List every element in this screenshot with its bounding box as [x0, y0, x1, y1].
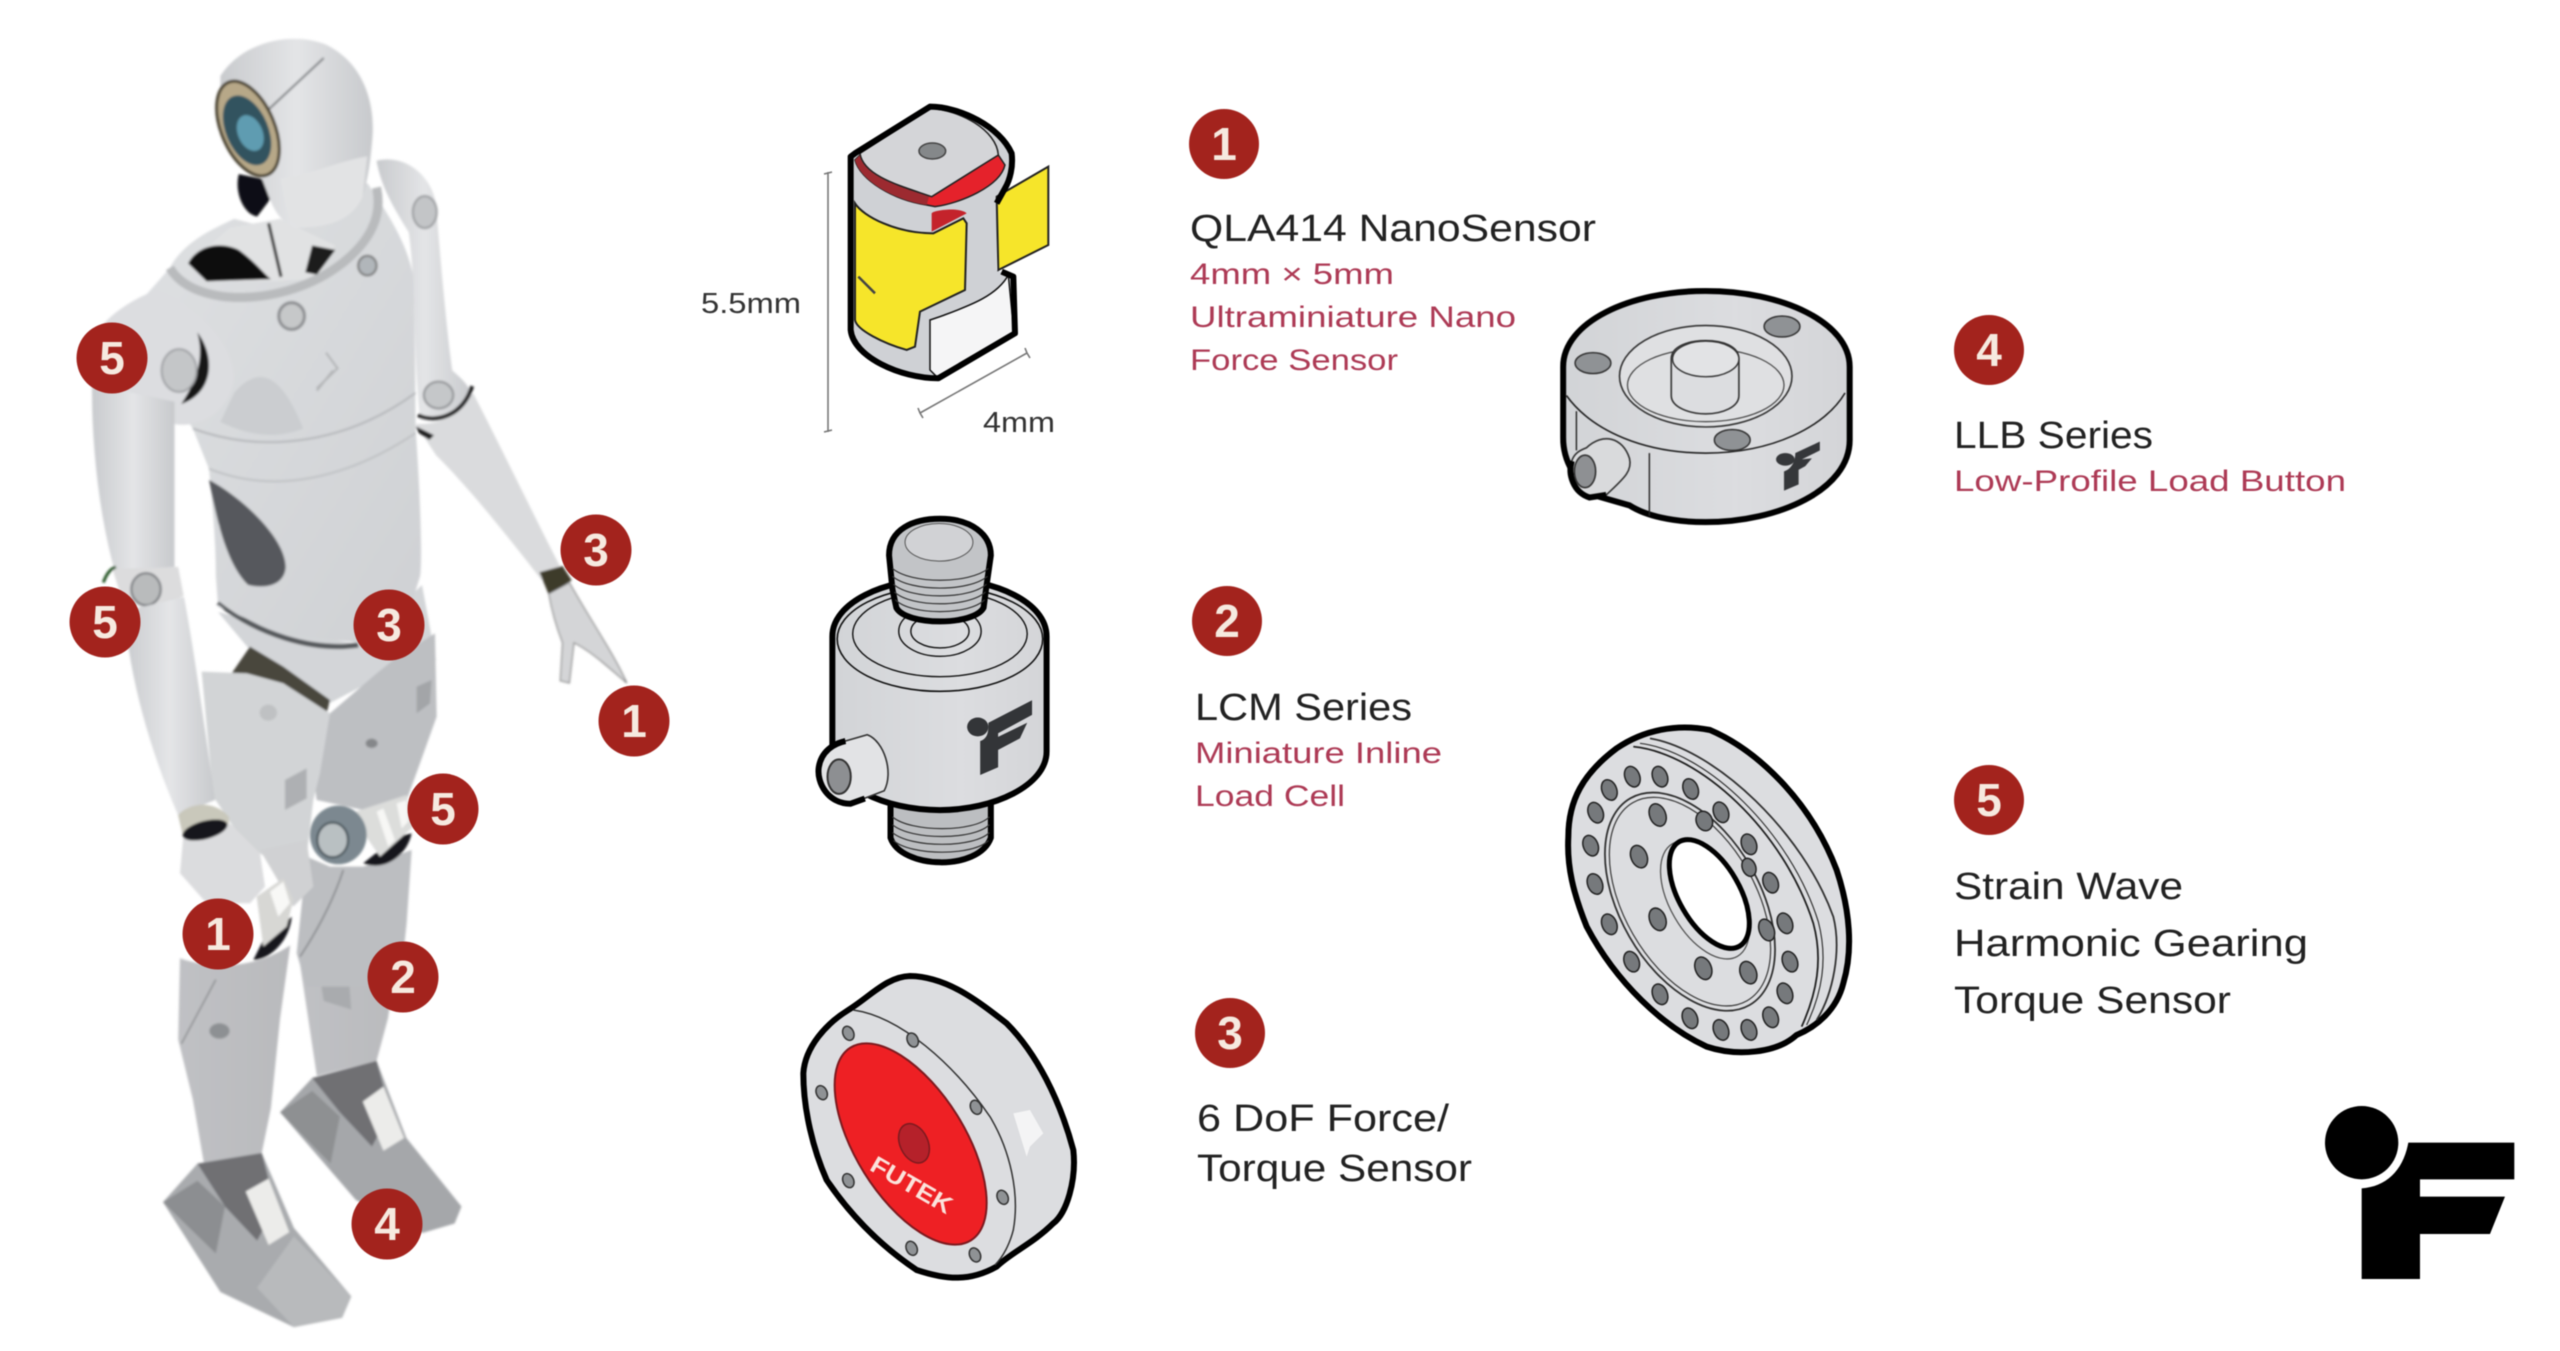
badge 5 — [1954, 765, 2024, 835]
icon: strain wave torque sensor — [1568, 727, 1849, 1052]
red face — [804, 1019, 1017, 1269]
text block: item 1 — [1189, 109, 1596, 377]
badge 1 fingertip — [598, 686, 670, 756]
badge 1 knee: 1 — [205, 908, 231, 960]
description: Force Sensor — [1190, 344, 1398, 377]
badge 5 shoulder — [76, 322, 148, 394]
robot upper body — [92, 39, 627, 683]
badge 3 — [1195, 998, 1265, 1068]
badge 2: 2 — [1214, 595, 1240, 647]
heading: Harmonic Gearing — [1954, 923, 2308, 965]
right thigh — [313, 633, 437, 810]
outer body — [803, 976, 1074, 1278]
description — [1195, 737, 1442, 813]
text block: item 2 — [1192, 586, 1442, 813]
neck opening — [188, 219, 335, 281]
badge 5 knee: 5 — [430, 783, 456, 835]
badge 2 shin — [368, 942, 438, 1012]
right shin upper — [297, 850, 412, 987]
left shoulder — [92, 290, 234, 425]
label: 4mm: 4mm — [983, 407, 1055, 439]
heading: LCM Series — [1195, 687, 1412, 729]
head — [204, 39, 373, 228]
description: Ultraminiature Nano — [1190, 301, 1516, 334]
description: Load Cell — [1195, 780, 1345, 813]
description: Low-Profile Load Button — [1954, 465, 2346, 498]
red slot — [932, 209, 967, 232]
badge 2 — [1192, 586, 1262, 656]
left thigh — [202, 672, 330, 873]
face ring — [853, 1010, 1015, 1265]
robot illustration — [92, 39, 627, 1327]
badge 5 elbow — [70, 586, 140, 658]
yellow flex wrap — [855, 203, 967, 350]
sensor body — [851, 107, 1048, 378]
badge 5: 5 — [1976, 774, 2002, 826]
heading — [1197, 1098, 1472, 1190]
label: 5.5mm: 5.5mm — [701, 288, 801, 320]
right knee joint — [310, 795, 413, 866]
top stud — [889, 519, 991, 621]
center post — [1671, 341, 1739, 414]
badge 3 waist — [354, 590, 424, 660]
left shin — [178, 945, 290, 1166]
cylinder — [832, 579, 1047, 810]
badge 1 knee — [182, 898, 254, 970]
collar — [170, 187, 378, 297]
center recess — [1619, 325, 1792, 427]
text block: item 5 — [1954, 765, 2308, 1022]
connector — [1570, 439, 1630, 498]
icon: QLA414 NanoSensor with dimensions — [824, 107, 1048, 432]
badge 5 elbow: 5 — [92, 596, 118, 648]
bolt holes — [814, 1024, 1011, 1264]
left foot — [163, 1153, 351, 1327]
top face — [860, 108, 998, 197]
badge 1 — [1189, 109, 1259, 179]
left knee joint — [253, 840, 313, 960]
heading: QLA414 NanoSensor — [1190, 208, 1596, 250]
body — [1563, 291, 1850, 522]
badge 5 knee — [408, 774, 478, 844]
icon: LCM load cell — [818, 519, 1047, 862]
right shin lower — [298, 911, 404, 1076]
heading — [1954, 866, 2308, 1022]
hip joint — [232, 647, 330, 713]
pelvis — [218, 585, 436, 703]
hand on knee — [180, 823, 265, 903]
badge 3 waist: 3 — [376, 599, 402, 651]
heading: LLB Series — [1954, 415, 2153, 457]
brand text: FUTEK — [866, 1151, 958, 1220]
heading: Strain Wave — [1954, 866, 2183, 908]
heading: Torque Sensor — [1954, 980, 2231, 1022]
logo mark — [1776, 442, 1820, 491]
heading: 6 DoF Force/ — [1197, 1098, 1449, 1140]
icon: LLB load button — [1563, 291, 1850, 522]
description: Miniature Inline — [1195, 737, 1442, 770]
badge 4 — [1954, 315, 2024, 385]
badge 3: 3 — [1217, 1007, 1243, 1059]
robot lower legs — [163, 911, 461, 1327]
red band — [855, 155, 1005, 207]
text block: item 3 — [1195, 998, 1472, 1190]
badge 4 foot: 4 — [374, 1198, 400, 1250]
badge 4: 4 — [1976, 324, 2002, 376]
heading: Torque Sensor — [1197, 1148, 1472, 1190]
description: 4mm × 5mm — [1190, 258, 1394, 291]
description — [1190, 258, 1516, 377]
outline — [851, 107, 1015, 378]
company logo — [2325, 1106, 2514, 1279]
badge 3 wrist — [560, 514, 632, 586]
white base — [930, 275, 1014, 377]
side mark — [1013, 1110, 1043, 1157]
rim — [1568, 727, 1849, 1052]
thighs and knees — [180, 633, 437, 987]
badge 4 foot — [352, 1188, 422, 1260]
badge 5 shoulder: 5 — [99, 332, 125, 384]
side connector — [818, 735, 888, 804]
logo mark — [967, 700, 1032, 775]
icon: 6 DoF force torque sensor — [803, 976, 1074, 1278]
right arm — [377, 159, 627, 683]
left elbow — [103, 567, 184, 612]
mounting holes — [1575, 316, 1800, 450]
bolt circle — [1580, 764, 1801, 1043]
torso — [142, 183, 421, 643]
badge 2 shin: 2 — [390, 951, 416, 1003]
badge 1: 1 — [1211, 118, 1237, 170]
badge 1 fingertip: 1 — [621, 695, 647, 747]
text block: item 4 — [1954, 315, 2346, 498]
abdomen panel — [209, 480, 286, 586]
yellow tab — [997, 167, 1048, 270]
inner ring — [1570, 763, 1810, 1040]
bottom thread — [891, 799, 991, 862]
right foot — [280, 1061, 461, 1233]
center bore — [1642, 826, 1768, 974]
badge 3 wrist: 3 — [583, 524, 609, 576]
left forearm — [124, 597, 230, 845]
left upper arm — [92, 384, 174, 571]
robot callout badges — [70, 322, 670, 1260]
dimension lines — [824, 172, 1030, 432]
